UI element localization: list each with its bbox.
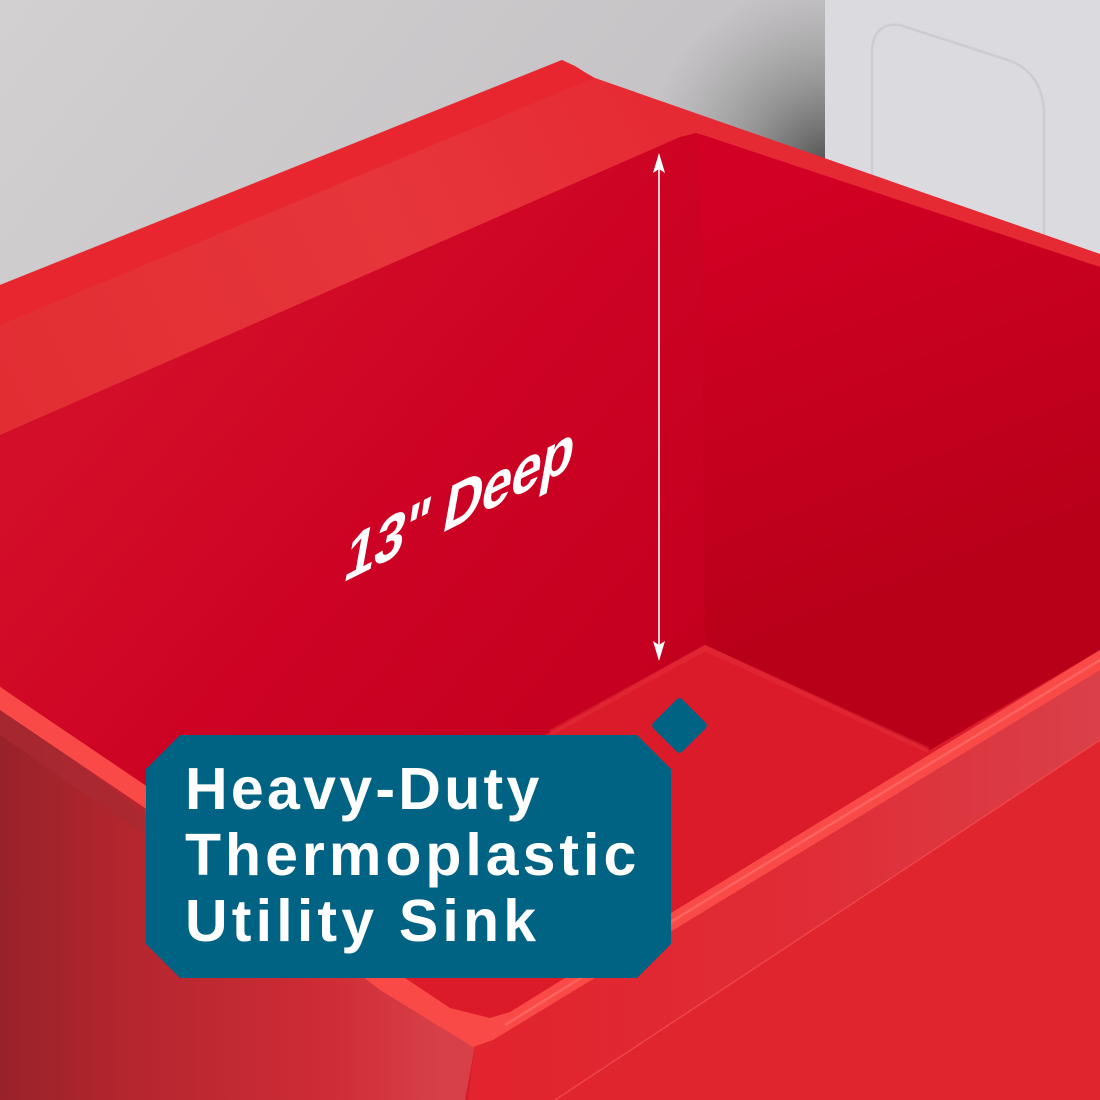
callout heading	[186, 768, 635, 954]
lower right panel	[555, 740, 1100, 1100]
depth arrow	[653, 153, 665, 661]
callout heading: Thermoplastic	[185, 822, 640, 888]
rim highlight	[505, 660, 1100, 1025]
right inner wall	[700, 134, 1100, 750]
back inner wall	[0, 133, 706, 978]
sink rim deck	[0, 60, 1100, 450]
sink basin floor	[410, 645, 1000, 1015]
depth label: 13" Deep	[339, 408, 581, 598]
callout heading: Utility Sink	[185, 888, 540, 954]
shaded band below rim	[0, 708, 145, 835]
callout diamond	[651, 697, 708, 754]
wall background	[0, 0, 825, 400]
backsplash ridge	[0, 60, 594, 325]
washer appliance	[825, 0, 1100, 300]
callout heading: Heavy-Duty	[185, 756, 543, 822]
callout	[146, 735, 671, 978]
panel seam	[555, 740, 1100, 1100]
sink base fill	[0, 430, 1100, 1100]
floor fillet highlights	[550, 648, 928, 750]
front right outer face	[468, 668, 1100, 1100]
front left outer face	[0, 705, 475, 1100]
bright rim strip	[0, 650, 1100, 1047]
